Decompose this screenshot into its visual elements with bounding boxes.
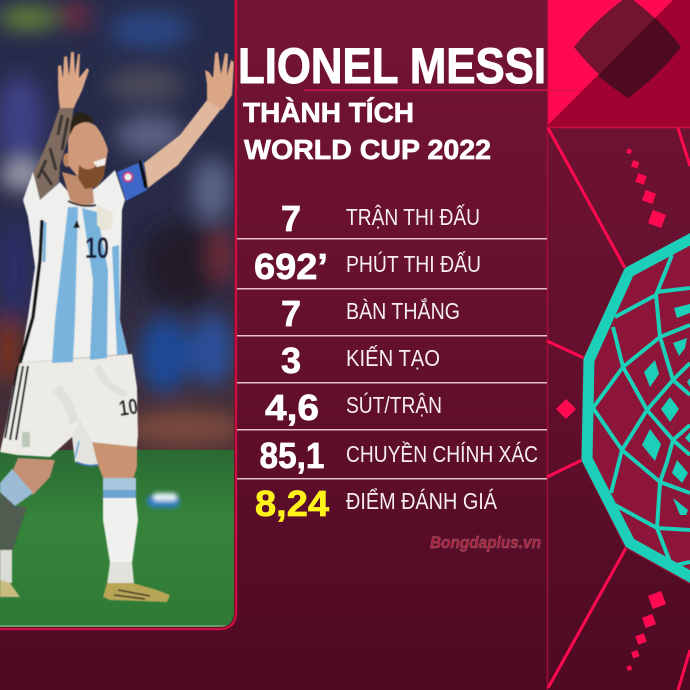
row: pass accuracy: 85,1 [260, 435, 324, 476]
row: pass accuracy [260, 435, 538, 476]
beard [78, 162, 106, 190]
row: minutes: PHÚT THI ĐẤU [346, 250, 481, 277]
pink spokes [547, 128, 690, 690]
left raised arm with tattoos [33, 106, 74, 200]
right hand [205, 52, 234, 110]
panel: player photo [0, 0, 245, 627]
captain armband [117, 161, 147, 201]
row: assists: 3 [281, 340, 301, 381]
row: shots per match: 4,6 [265, 387, 319, 428]
icon: pink diamond [556, 399, 576, 419]
column borders [546, 0, 548, 690]
row: goals: 7 [281, 293, 301, 334]
subtitle [243, 97, 491, 165]
row: matches: 7 [281, 198, 301, 239]
rear leg [12, 458, 55, 495]
row: rating [255, 483, 498, 524]
neck [62, 172, 94, 205]
row: rating: 8,24 [255, 483, 329, 524]
title underline [304, 90, 580, 91]
row: goals: BÀN THẮNG [346, 297, 460, 324]
photo frame [0, 0, 236, 629]
bottom dots trail [626, 591, 666, 671]
jersey crest [97, 205, 113, 231]
player: 10 [117, 394, 140, 421]
head [68, 122, 108, 189]
title: LIONEL MESSI [238, 38, 546, 94]
smile [93, 158, 106, 167]
top dots trail [626, 148, 666, 228]
row: minutes [254, 246, 481, 287]
blurred ball [147, 493, 180, 508]
geometric wheel emblem [581, 228, 690, 590]
blurred stadium crowd [0, 0, 245, 452]
pitch [0, 450, 234, 627]
jersey number: 10 [85, 232, 109, 265]
photo bottom light edge [0, 626, 227, 627]
watermark: Bongdaplus.vn [430, 533, 541, 552]
row: assists: KIẾN TẠO [346, 344, 440, 371]
subtitle: WORLD CUP 2022 [244, 134, 491, 165]
row: matches [281, 198, 480, 239]
right decorative column [547, 0, 690, 690]
top right colour block [547, 0, 690, 127]
front leg [90, 442, 137, 480]
player [0, 52, 234, 602]
shorts [0, 354, 138, 465]
boot [103, 583, 170, 602]
row: minutes: 692’ [254, 246, 328, 287]
row: shots per match [265, 387, 442, 428]
right arm [144, 100, 222, 188]
row: assists [281, 340, 440, 381]
ear [63, 153, 71, 167]
icon: layered diamond [574, 0, 681, 98]
jersey [20, 170, 128, 363]
left hand [58, 52, 89, 108]
row: shots per match: SÚT/TRẬN [346, 392, 442, 418]
row: matches: TRẬN THI ĐẤU [346, 203, 480, 230]
row: rating: ĐIỂM ĐÁNH GIÁ [346, 487, 498, 514]
hair [70, 112, 95, 135]
row: pass accuracy: CHUYỀN CHÍNH XÁC [346, 440, 538, 467]
subtitle: THÀNH TÍCH [243, 97, 414, 128]
adidas logo [73, 220, 80, 228]
stats table [237, 198, 547, 524]
row: goals [281, 293, 460, 334]
